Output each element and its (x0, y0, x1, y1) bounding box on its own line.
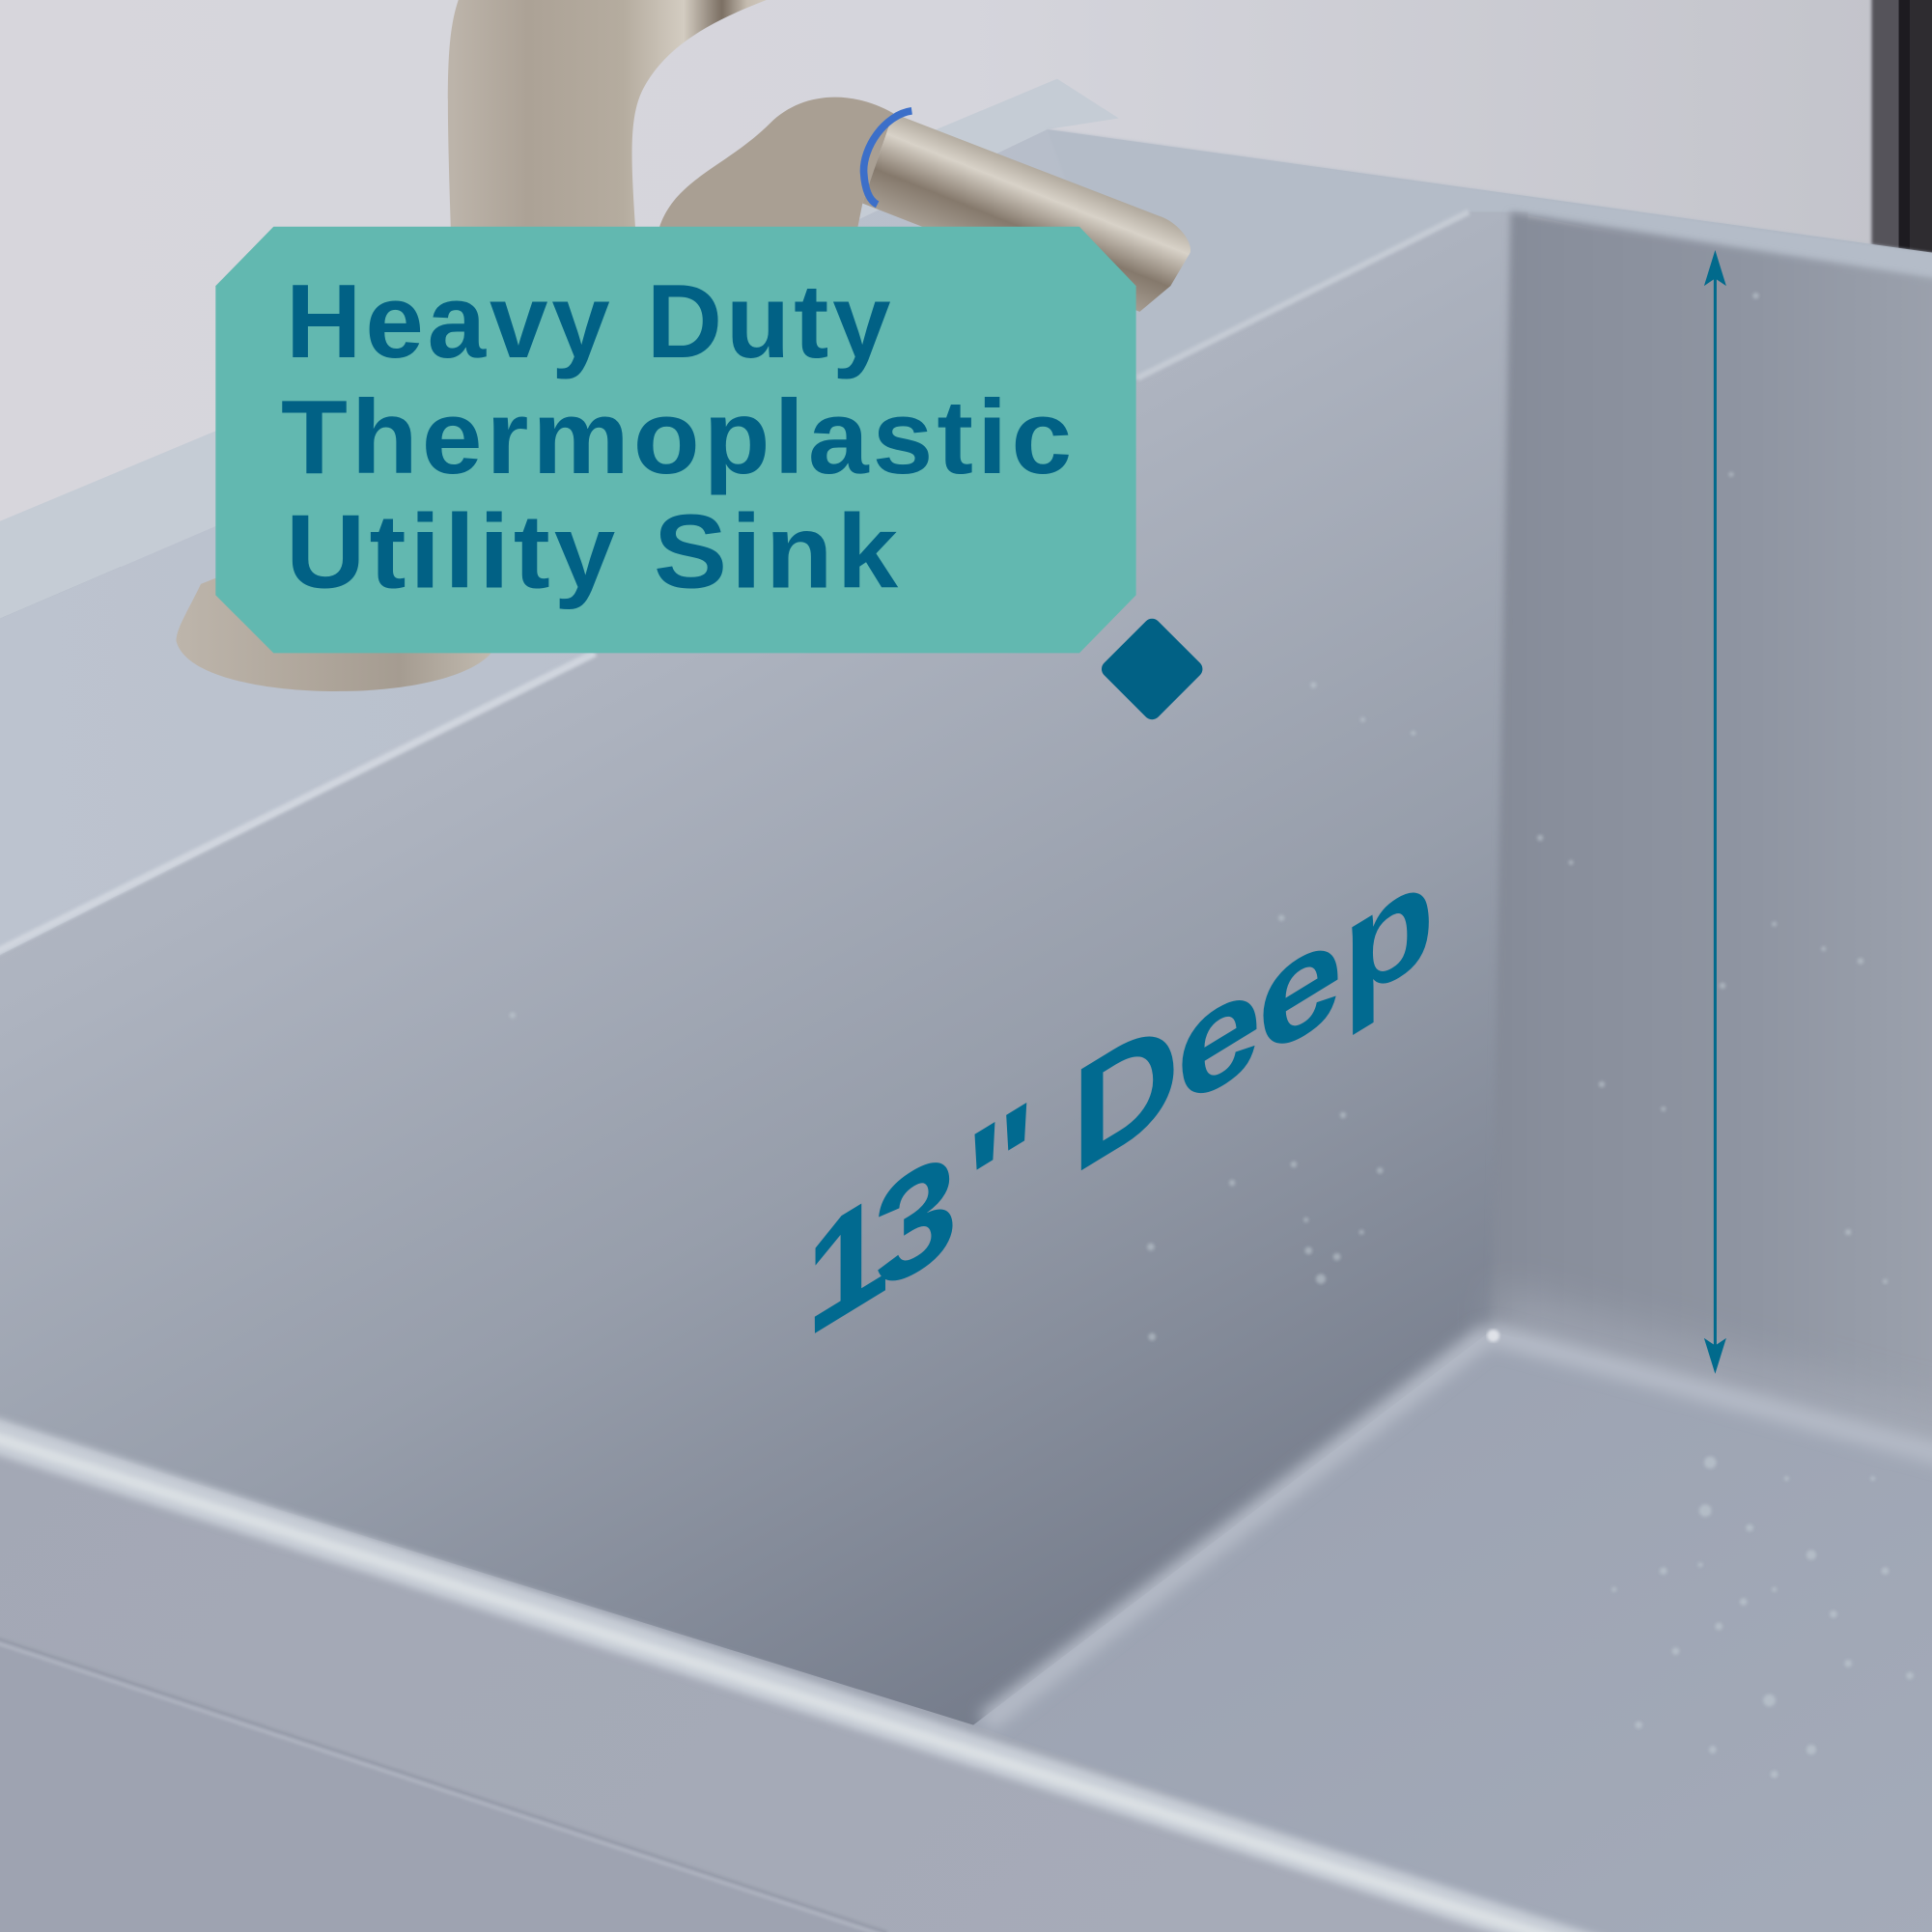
basin floor (973, 1330, 1932, 1932)
dark door frame at right edge (1871, 0, 1932, 253)
heading text: Thermoplastic (281, 378, 1076, 495)
heading text: Heavy Duty (286, 263, 894, 379)
right inner wall of basin (1491, 211, 1932, 1478)
water droplets on walls and floor (510, 293, 1914, 1778)
blue o-ring (864, 111, 911, 205)
bright top edge of front rim (0, 1407, 1614, 1932)
depth label: 13" Deep: 13" Deep (786, 833, 1449, 1362)
faucet base flange (176, 576, 495, 691)
lighter glow on lower right wall above floor seam (1498, 1288, 1932, 1478)
bright rim edge along back right (1048, 129, 1932, 379)
front rim of sink (0, 1412, 1596, 1932)
lower front panel of sink (0, 1638, 887, 1932)
wall (0, 0, 1932, 567)
left inner wall of basin (0, 211, 1527, 1725)
faucet handle hub (659, 98, 893, 234)
highlights along deck-to-basin edge (0, 211, 1469, 956)
back ledge of the sink (0, 79, 1119, 619)
diamond marker (1098, 615, 1206, 723)
bright seams at floor edges (986, 1333, 1932, 1722)
bright spot at floor corner (1487, 1330, 1499, 1342)
faucet handle lever (862, 113, 1190, 312)
sink deck (0, 129, 1932, 959)
callout panel: product title (215, 227, 1136, 653)
faucet spout (448, 0, 767, 234)
teal label shape (215, 227, 1136, 653)
heading text: Utility Sink (286, 493, 902, 610)
depth arrow (1704, 250, 1726, 1374)
